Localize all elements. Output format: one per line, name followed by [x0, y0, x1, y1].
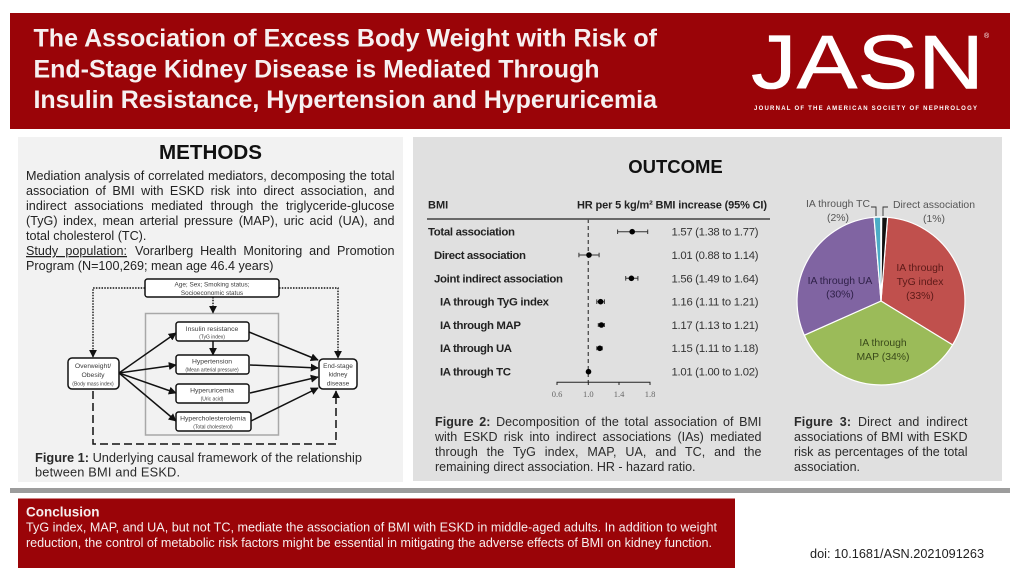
pie labels: (30%) [826, 290, 854, 300]
methods text: Program (N=100,269; mean age 46.4 years) [26, 259, 273, 273]
panel: outcome [413, 137, 1002, 481]
methods text: indirect associations mediated through the triglyceride-glucose [26, 199, 394, 213]
dotted confounder arrows [93, 288, 338, 358]
methods text [26, 169, 394, 273]
pie labels: TyG index [897, 277, 944, 288]
methods text: total cholesterol (TC). [26, 229, 146, 243]
JASN logo: JASN [751, 20, 984, 106]
figure 2 caption: remaining direct association. HR - hazard ratio. [435, 460, 696, 474]
diagram box labels: (TyG index) [199, 334, 225, 340]
forest plot [427, 200, 770, 399]
figure 3 caption: risk as percentages of the total [794, 445, 968, 459]
figure 3 caption: Figure 3: Direct and indirect [794, 415, 968, 429]
diagram box labels: kidney [329, 372, 348, 378]
conclusion panel [18, 498, 735, 568]
forest row labels: IA through MAP [440, 320, 521, 332]
forest values: 1.56 (1.49 to 1.64) [672, 274, 759, 286]
forest values [672, 226, 759, 378]
diagram boxes [68, 279, 357, 431]
diagram box labels: (Body mass index) [72, 382, 114, 388]
methods text: (TyG) index, mean arterial pressure (MAP), uric acid (UA), and [26, 214, 394, 228]
diagram box labels: Age; Sex; Smoking status; [175, 282, 250, 288]
forest plot: BMI [428, 200, 448, 212]
forest axis [557, 382, 650, 385]
title [34, 24, 658, 114]
pie labels: (1%) [923, 214, 945, 225]
figure 2 caption: Figure 2: Decomposition of the total association of BMI [435, 415, 762, 429]
forest row labels: Direct association [434, 250, 526, 262]
title: The Association of Excess Body Weight with Risk of [34, 24, 658, 52]
forest values: 1.16 (1.11 to 1.21) [672, 296, 759, 308]
conclusion panel: Conclusion [26, 504, 100, 520]
outcome heading: OUTCOME [628, 156, 723, 177]
pie labels: MAP (34%) [857, 352, 909, 363]
figure 1 caption: Figure 1: Underlying causal framework of the relationship [35, 450, 362, 465]
panel: methods [18, 137, 403, 482]
pie labels: (2%) [827, 213, 849, 224]
methods text: Study population: [26, 244, 127, 258]
forest plot: 0.6 [552, 389, 562, 399]
forest values: 1.01 (0.88 to 1.14) [672, 250, 759, 262]
title: Insulin Resistance, Hypertension and Hyperuricemia [34, 86, 658, 114]
forest row labels [428, 226, 563, 378]
figure 2 caption: with ESKD risk into indirect associations (IAs) mediated [434, 430, 762, 444]
mediator arrows [119, 332, 318, 421]
methods text: Mediation analysis of correlated mediators, decomposing the total [26, 169, 394, 183]
pie leader lines [871, 207, 888, 216]
forest plot: 1.8 [645, 389, 655, 399]
forest plot: HR per 5 kg/m² BMI increase (95% CI) [577, 200, 767, 212]
pie labels: IA through TC [806, 199, 870, 210]
figure 3 caption [794, 415, 968, 474]
pie labels: IA through [896, 263, 944, 274]
diagram box labels: (Total cholesterol) [193, 424, 233, 430]
diagram box labels: End-stage [323, 363, 353, 370]
title: End-Stage Kidney Disease is Mediated Through [34, 56, 600, 84]
pie labels: IA through UA [808, 276, 872, 287]
causal framework diagram [68, 279, 357, 444]
forest markers [579, 230, 648, 350]
figure 3 caption: association. [794, 460, 860, 474]
forest row labels: IA through UA [440, 343, 512, 355]
forest plot: 1.0 [583, 389, 594, 399]
JASN logo: ® [984, 32, 990, 40]
methods text: association of BMI with ESKD risk into direct association, and [26, 184, 394, 198]
figure 1 caption: between BMI and ESKD. [35, 464, 180, 480]
dashed direct arrow [93, 391, 336, 444]
conclusion panel: reduction, the control of metabolic risk factors might be essential in mitigating the adverse effects of BMI on kidney function. [26, 536, 712, 550]
forest row labels: Total association [428, 226, 515, 238]
pie labels: Direct association [893, 200, 975, 211]
diagram box labels: Overweight/ [75, 363, 111, 370]
diagram box labels: Hypertension [192, 358, 232, 366]
pie labels [806, 199, 975, 363]
pie labels: IA through [859, 338, 907, 349]
forest values: 1.17 (1.13 to 1.21) [672, 320, 759, 332]
figure 3 caption: associations of BMI with ESKD [794, 430, 968, 444]
diagram box labels [72, 282, 353, 430]
diagram box labels: (Uric acid) [201, 396, 224, 402]
diagram box labels: Hypercholesterolemia [180, 416, 246, 422]
forest values: 1.15 (1.11 to 1.18) [672, 343, 759, 355]
forest row labels: IA through TyG index [440, 296, 550, 308]
conclusion panel: TyG index, MAP, and UA, but not TC, mediate the association of BMI with ESKD in middle-aged adults. In addition to weight [26, 520, 718, 534]
forest row labels: IA through TC [440, 366, 511, 378]
forest plot: 1.4 [614, 389, 625, 399]
diagram box labels: Obesity [81, 372, 105, 379]
diagram box labels: Insulin resistance [186, 326, 238, 333]
pie labels: (33%) [906, 291, 934, 302]
methods heading: METHODS [159, 141, 262, 164]
JASN logo: JOURNAL OF THE AMERICAN SOCIETY OF NEPHROLOGY [754, 106, 977, 112]
header banner [10, 13, 1010, 129]
diagram box labels: disease [327, 380, 350, 388]
doi: doi: 10.1681/ASN.2021091263 [810, 547, 984, 561]
forest values: 1.01 (1.00 to 1.02) [672, 366, 759, 378]
pie chart [797, 199, 975, 385]
forest row labels: Joint indirect association [434, 274, 563, 286]
diagram box labels: (Mean arterial pressure) [185, 368, 239, 374]
figure 2 caption: through the TyG index, MAP, UA, and TC, and the [435, 445, 762, 459]
forest values: 1.57 (1.38 to 1.77) [672, 226, 759, 238]
figure 2 caption [434, 415, 762, 474]
methods text: Vorarlberg Health Monitoring and Promotion [135, 244, 394, 258]
divider bar [10, 488, 1010, 493]
diagram box labels: Socioeconomic status [181, 290, 243, 297]
diagram box labels: Hyperuricemia [190, 388, 234, 394]
figure 1 caption [35, 450, 362, 480]
